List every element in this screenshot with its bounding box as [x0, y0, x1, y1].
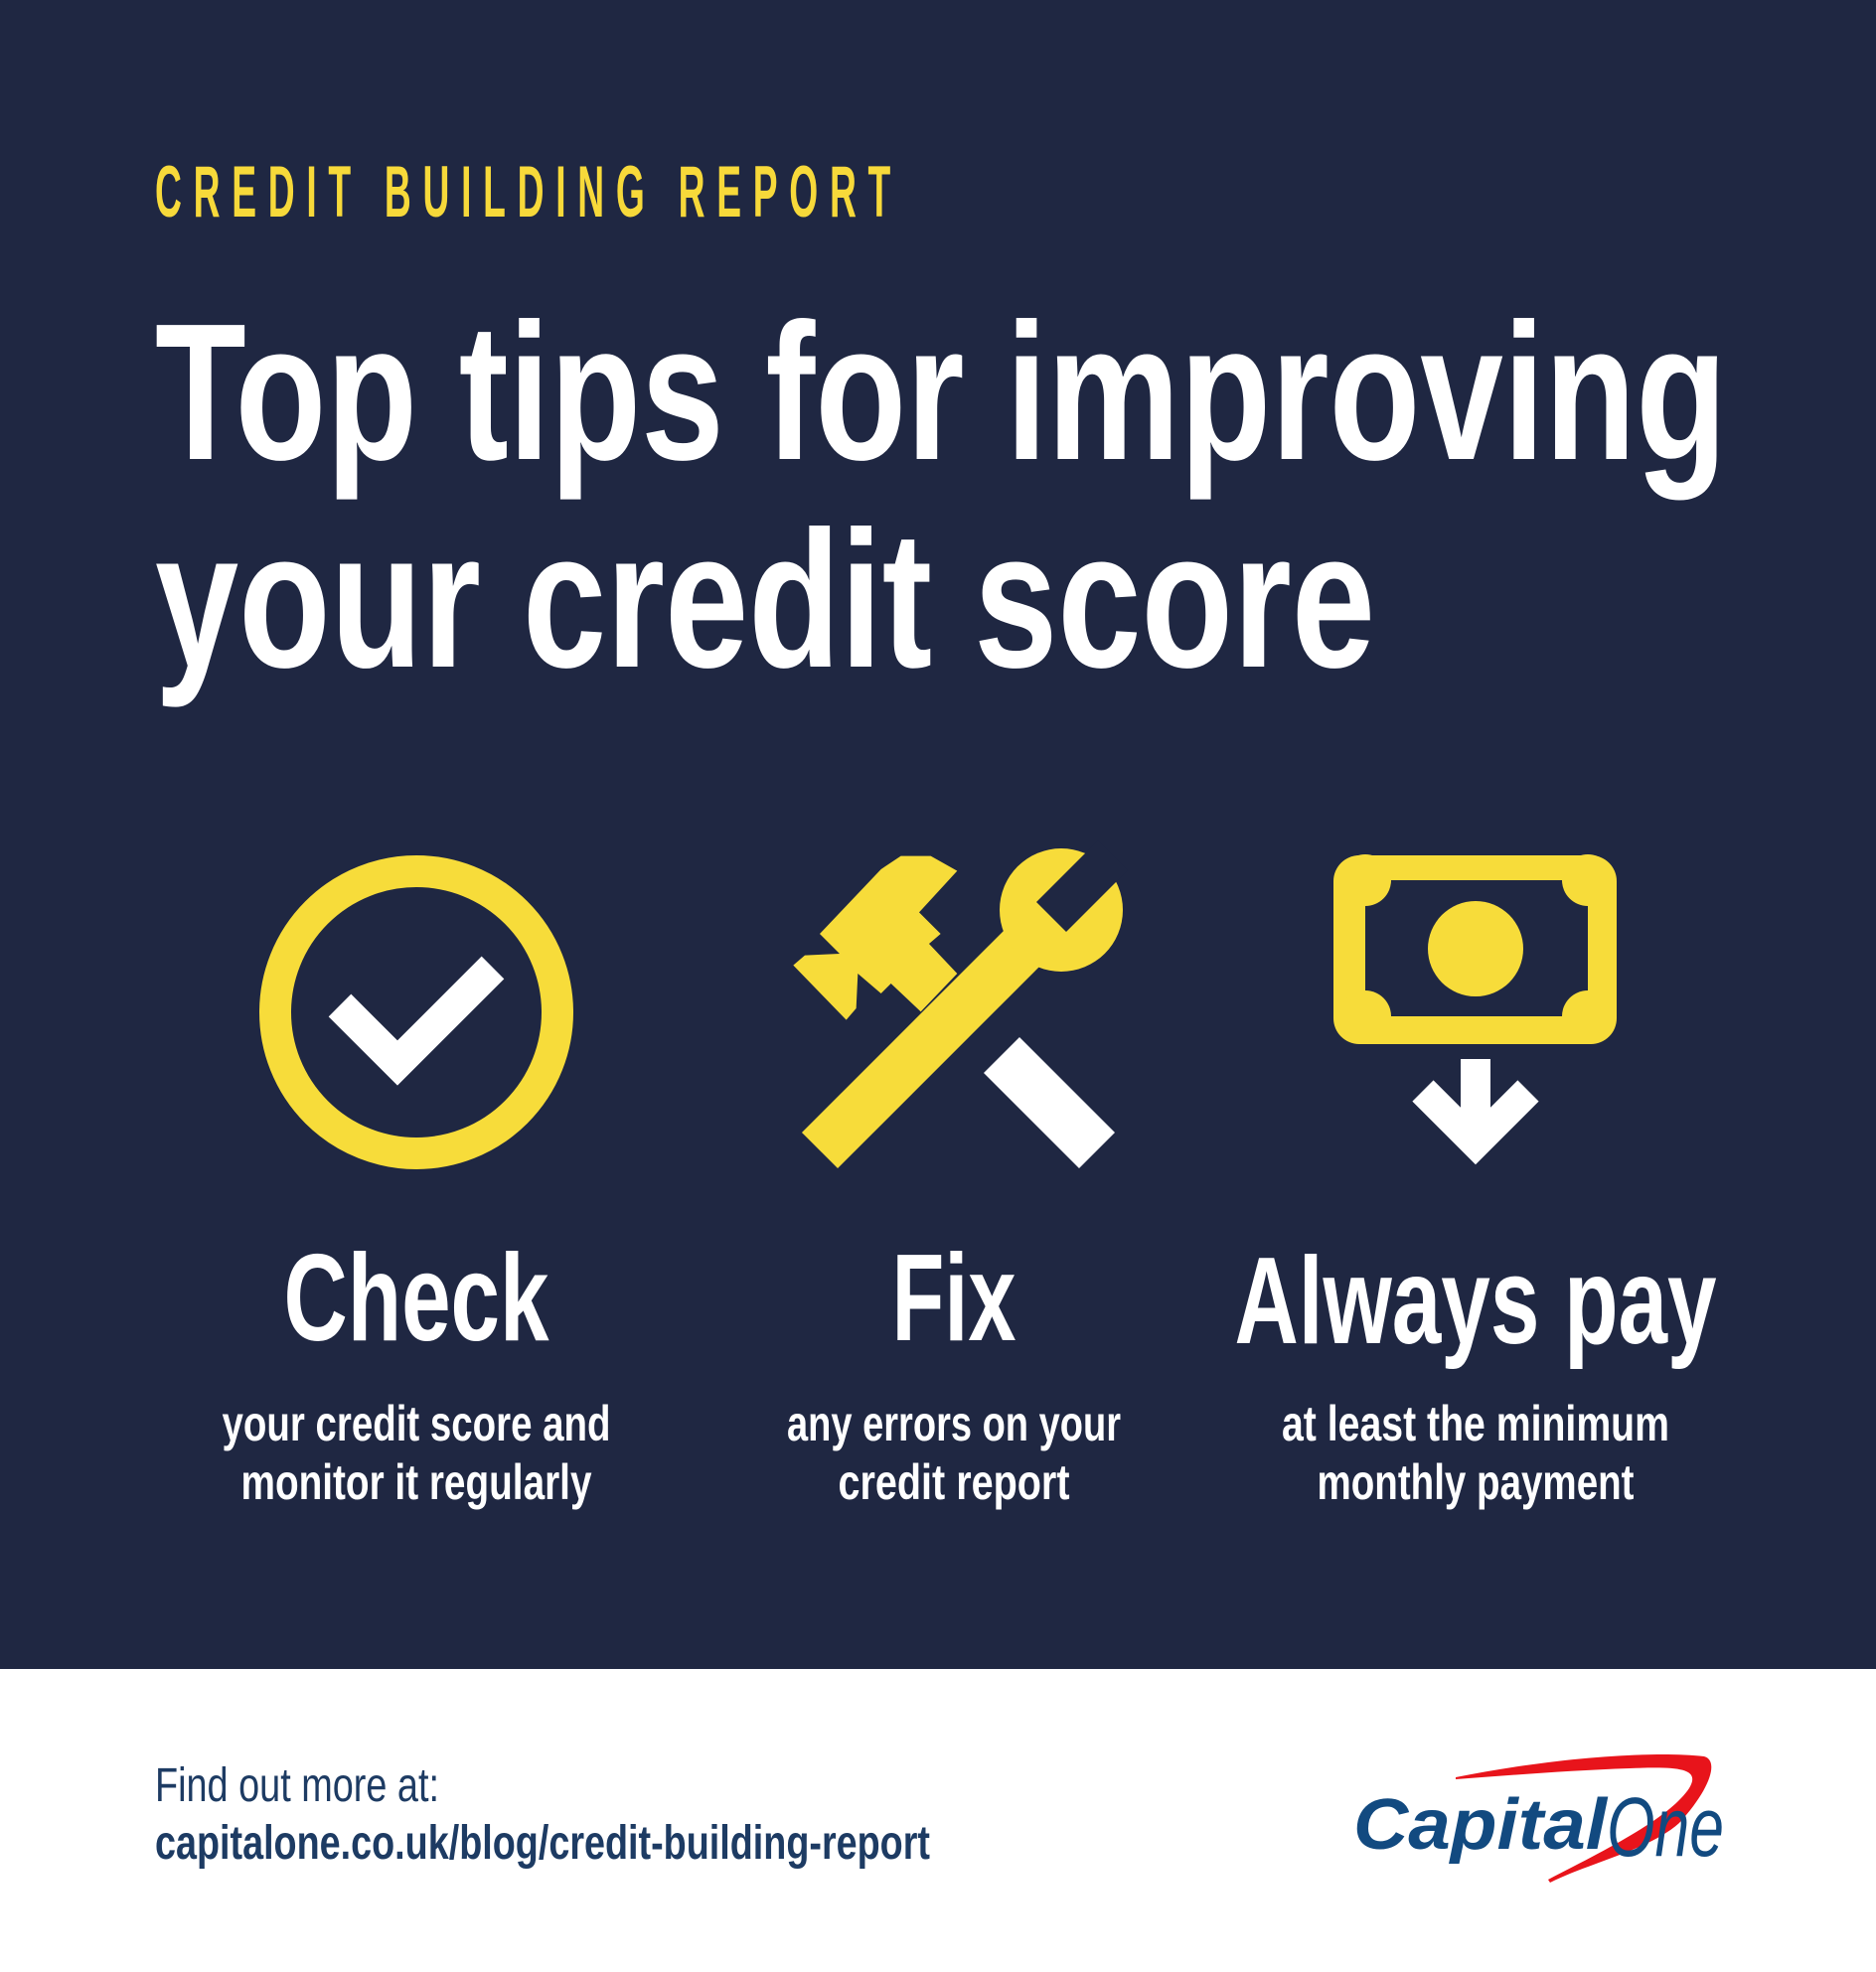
column: check: Check [284, 1230, 549, 1367]
column: fix: any errors on your [787, 1396, 1121, 1451]
column: fix [787, 1230, 1121, 1510]
footer text [155, 1759, 930, 1870]
column: check [223, 1230, 610, 1510]
logo: Capital One: One [1607, 1780, 1724, 1874]
icon: tools [793, 840, 1128, 1168]
column: always pay: monthly payment [1318, 1454, 1635, 1510]
icon: money with down arrow [1333, 854, 1617, 1143]
eyebrow label: CREDIT BUILDING REPORT [155, 152, 902, 232]
logo: Capital One: Capital [1353, 1785, 1609, 1865]
column: always pay: at least the minimum [1282, 1396, 1669, 1451]
column: check: your credit score and [223, 1396, 610, 1451]
logo: Capital One [1353, 1754, 1724, 1883]
icon: check circle [275, 871, 557, 1153]
footer text: capitalone.co.uk/blog/credit-building-report [155, 1817, 930, 1870]
column: check: monitor it regularly [240, 1454, 592, 1510]
column: fix: Fix [892, 1230, 1016, 1367]
title [155, 283, 1727, 708]
title: your credit score [155, 491, 1375, 708]
footer text: Find out more at: [155, 1759, 439, 1812]
column: always pay [1234, 1233, 1717, 1510]
column: fix: credit report [839, 1454, 1070, 1510]
